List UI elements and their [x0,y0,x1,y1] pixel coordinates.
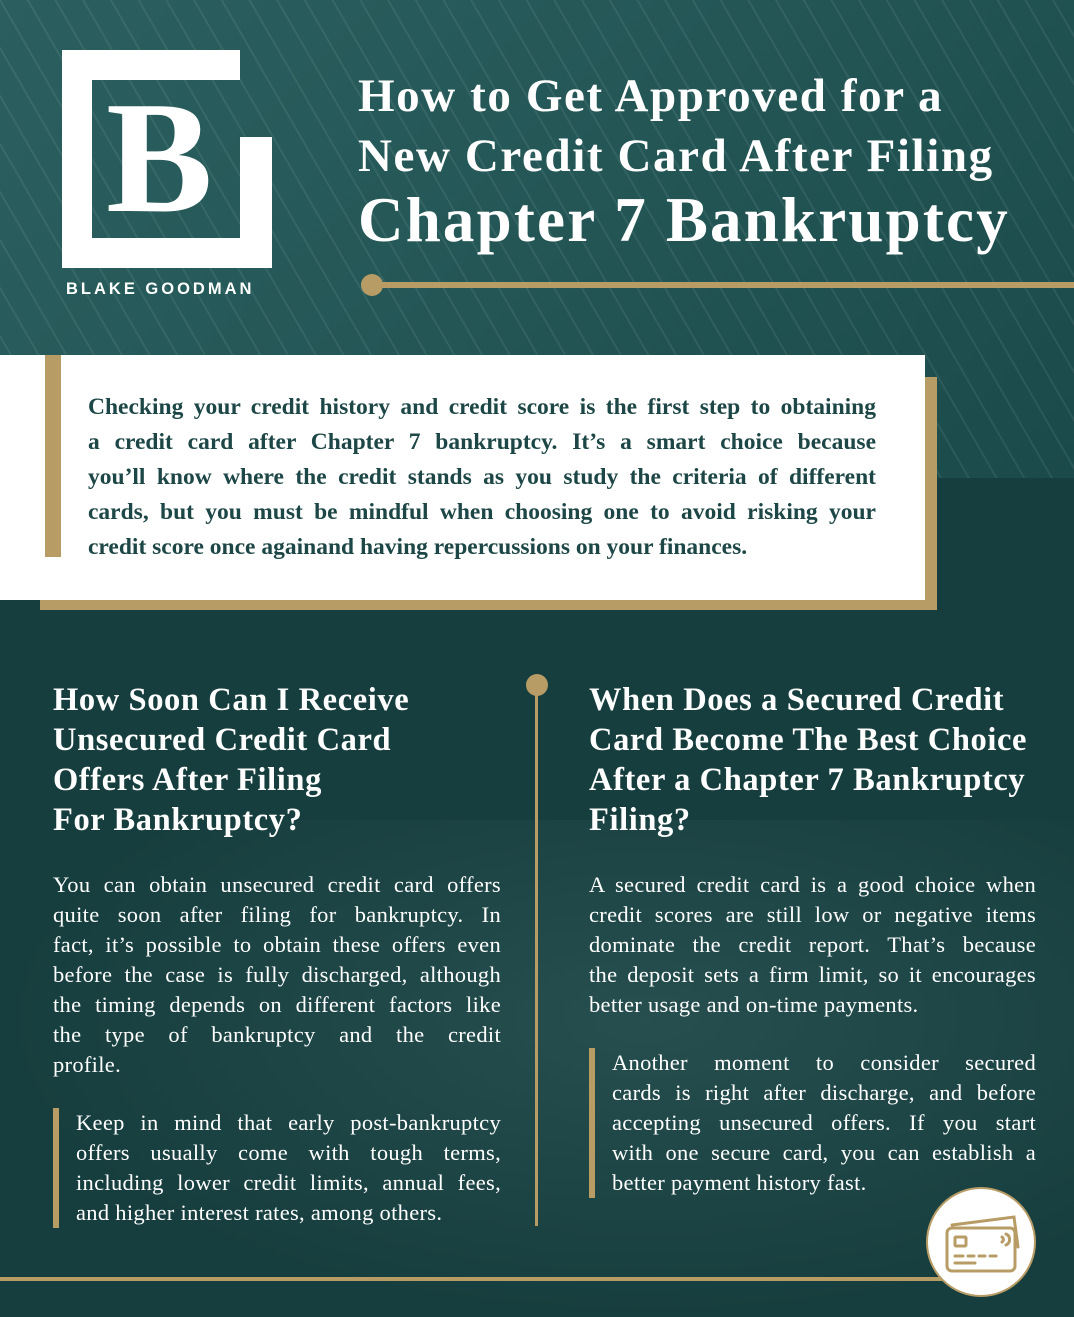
heading left: Unsecured Credit Card [53,722,391,758]
heading left: Offers After Filing [53,762,322,798]
callout left: offers usually come with tough terms, [76,1140,501,1165]
intro text: credit score once againand having repercussions on your finances. [88,534,747,560]
callout left: Keep in mind that early post-bankruptcy [76,1110,501,1135]
text right: the deposit sets a firm limit, so it encourages [589,962,1036,987]
text left: the type of bankruptcy and the credit [53,1022,501,1047]
heading right [589,682,1027,838]
text left: quite soon after filing for bankruptcy. In [53,902,501,927]
heading right: Card Become The Best Choice [589,722,1027,758]
icon: credit card [926,1187,1036,1297]
intro text: cards, but you must be mindful when choosing one to avoid risking your [88,499,876,525]
heading right: After a Chapter 7 Bankruptcy [589,762,1025,798]
logo: BLAKE GOODMAN [66,280,254,298]
callout left: including lower credit limits, annual fees, [76,1170,501,1195]
callout right: Another moment to consider secured [612,1050,1036,1075]
heading left [53,682,409,838]
heading left: How Soon Can I Receive [53,682,409,718]
title: New Credit Card After Filing [358,130,994,182]
callout left [53,1108,501,1228]
callout right [589,1048,1036,1198]
intro panel [0,355,937,610]
intro text: Checking your credit history and credit score is the first step to obtaining [88,394,876,420]
text left [53,872,501,1077]
callout left: and higher interest rates, among others. [76,1200,442,1225]
heading right: Filing? [589,802,691,838]
left column [53,682,501,1228]
text left: profile. [53,1052,121,1077]
title underline [361,274,1074,296]
text right: dominate the credit report. That’s because [589,932,1036,957]
text right: A secured credit card is a good choice when [589,872,1036,897]
callout right: with one secure card, you can establish a [612,1140,1036,1165]
right column [589,682,1036,1198]
title: How to Get Approved for a [358,70,943,122]
intro text: a credit card after Chapter 7 bankruptcy. It’s a smart choice because [88,429,876,455]
logo [62,50,272,298]
heading left: For Bankruptcy? [53,802,302,838]
callout right: better payment history fast. [612,1170,867,1195]
title [358,70,1010,255]
heading right: When Does a Secured Credit [589,682,1004,718]
title: Chapter 7 Bankruptcy [358,185,1010,255]
logo: B [106,68,213,246]
intro text: you’ll know where the credit stands as you study the criteria of different [88,464,876,490]
callout right: cards is right after discharge, and before [612,1080,1036,1105]
text left: You can obtain unsecured credit card offers [53,872,501,897]
divider center [526,674,548,1226]
intro text [88,394,876,560]
text left: before the case is fully discharged, although [53,962,501,987]
text right: better usage and on-time payments. [589,992,918,1017]
text left: the timing depends on different factors like [53,992,501,1017]
text right [589,872,1036,1017]
callout right: accepting unsecured offers. If you start [612,1110,1036,1135]
text left: fact, it’s possible to obtain these offers even [53,932,501,957]
bottom line [0,1277,960,1281]
text right: credit scores are still low or negative items [589,902,1036,927]
